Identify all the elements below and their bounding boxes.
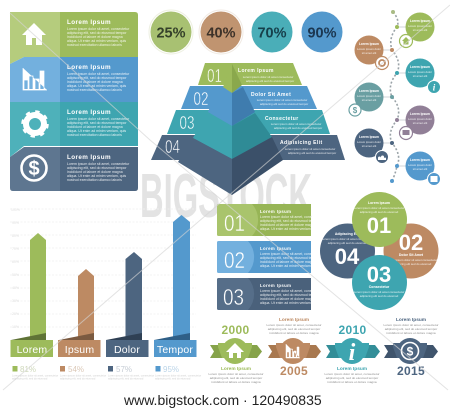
row: home: adipiscing elit, sed do eiusmod tempor (67, 31, 127, 35)
row: dollar: Lorem ipsum dolor sit amet, consectetur (67, 162, 130, 166)
level 3 strip (167, 110, 330, 134)
node: brown: Lorem ipsum dolor (357, 47, 381, 51)
wavy connector (390, 12, 399, 181)
row: home: nostrud exercitation ullamco laboris (67, 43, 122, 47)
row: dollar: adipiscing elit, sed do eiusmod tempor (67, 166, 127, 170)
connector stubs (383, 27, 406, 166)
node: green (400, 12, 434, 48)
footer url: www.bigstock.com · 120490835 (123, 392, 322, 408)
bar: Tempor: Tempor (157, 344, 193, 356)
row: gear: adipiscing elit, sed do eiusmod tempor (67, 121, 127, 125)
node: navy: Lorem Ipsum (359, 135, 379, 139)
node: purple (400, 106, 434, 140)
row: home: Lorem Ipsum (67, 19, 111, 26)
box 03 (217, 278, 323, 310)
box 02: incididunt ut labore et dolore magna (260, 260, 316, 264)
circle: 70%: 70% (257, 26, 287, 42)
petal diagram (320, 192, 438, 310)
milestone 2010: Lorem ipsum dolor sit amet, consectetur (324, 372, 380, 376)
milestone 2000: Lorem Ipsum (221, 366, 251, 372)
petal 01: 01 (367, 213, 391, 238)
node: teal: Lorem Ipsum (410, 65, 430, 69)
node: brown: sit amet elit (362, 51, 377, 55)
milestone 2000: incididunt ut labore et dolore magna (211, 380, 261, 384)
level 1 strip (198, 63, 302, 86)
level 1 strip: Lorem ipsum dolor sit amet consectetur (243, 75, 293, 79)
bar: Tempor (154, 215, 196, 357)
box 02 (217, 241, 323, 273)
bar: Lorem: Lorem (17, 344, 47, 356)
legend: 81% (20, 365, 36, 374)
level 3 strip: adipiscing elit sed do eiusmod tempor (274, 126, 322, 130)
legend: Lorem ipsum dolor sit amet, consectetur (155, 374, 201, 378)
row: gear: nostrud exercitation ullamco laboris (67, 133, 122, 137)
row: chart: nostrud exercitation ullamco laboris (67, 88, 122, 92)
petal 03: Lorem ipsum dolor sit amet consectetur (354, 290, 404, 294)
milestone 2005: Lorem Ipsum (279, 317, 309, 323)
milestone 2015: 2015 (397, 364, 425, 378)
petal 02 (384, 224, 438, 278)
circle: 70% (252, 12, 292, 52)
milestone 2015: incididunt ut labore et dolore magna (386, 331, 436, 335)
milestone 2000: 2000 (222, 323, 249, 337)
legend: 54% (68, 365, 84, 374)
node: teal: sit amet elit (413, 74, 428, 78)
petal 01: adipiscing elit sed do eiusmod (360, 210, 399, 214)
node: grey teal: Lorem Ipsum (359, 89, 379, 93)
box 02: 02 (224, 247, 245, 273)
petal 01 (352, 192, 407, 247)
node: navy: sit amet elit (362, 144, 377, 148)
legend: 57% (116, 365, 132, 374)
petal 02: 02 (399, 230, 423, 255)
circle: 40% (199, 10, 243, 54)
milestone 2010: i (349, 340, 356, 366)
legend: adipiscing elit, sed do eiusmod (155, 376, 191, 380)
level 3 strip: 03 (180, 113, 194, 133)
legend: adipiscing elit, sed do eiusmod (12, 376, 48, 380)
center square (375, 247, 383, 255)
axis labels: 20% (12, 312, 19, 316)
node: purple: sit amet elit (413, 121, 428, 125)
petal 04: 04 (335, 244, 360, 269)
axis labels: 30% (12, 299, 19, 303)
axis labels: 60% (12, 260, 19, 264)
node: grey teal (349, 82, 384, 116)
legend: Lorem ipsum dolor sit amet, consectetur (60, 374, 106, 378)
axis labels: 80% (12, 234, 19, 238)
petal 04 (320, 224, 375, 278)
box 01: 01 (224, 210, 245, 236)
circle: 40%: 40% (206, 26, 236, 42)
milestone 2010: Lorem Ipsum (337, 366, 367, 372)
petal 03: Consectetur (369, 285, 390, 289)
row: dollar: incididunt ut labore et dolore magna (67, 170, 123, 174)
node: green: Lorem Ipsum (410, 19, 430, 23)
level 3 strip: Consectetur (265, 116, 299, 122)
row: home: aliqua. Ut enim ad minim veniam, quis (67, 39, 126, 43)
bar: Dolor (106, 252, 148, 357)
node: blue: sit amet elit (413, 167, 428, 171)
row: gear: aliqua. Ut enim ad minim veniam, quis (67, 129, 126, 133)
level 1 strip: 01 (207, 66, 222, 86)
row: chart: incididunt ut labore et dolore magna (67, 80, 123, 84)
circle: 90% (302, 12, 342, 52)
milestone 2005: adipiscing elit, sed do eiusmod tempor (268, 327, 320, 331)
legend (12, 365, 201, 380)
axis labels: 70% (12, 247, 19, 251)
node: blue: Lorem ipsum dolor (408, 163, 432, 167)
circle: 25% (149, 10, 193, 54)
bar: Lorem (10, 233, 53, 357)
petal 03: adipiscing elit sed do eiusmod (360, 294, 399, 298)
row: home: incididunt ut labore et dolore magna (67, 35, 123, 39)
box 03: Lorem Ipsum (260, 283, 291, 288)
milestone 2015: $ (407, 344, 414, 358)
row: chart (10, 57, 138, 102)
axis labels (11, 208, 20, 329)
petal 04: Lorem ipsum dolor sit amet consectetur (322, 237, 372, 241)
axis labels: 10% (12, 325, 19, 329)
milestone 2015 (383, 317, 439, 378)
node: grey teal: $ (353, 106, 358, 115)
box 01: Lorem ipsum dolor sit amet, consectetur (260, 215, 323, 219)
axis labels: 50% (12, 273, 19, 277)
grid lines (10, 209, 196, 327)
node: blue (406, 152, 440, 186)
node: teal (406, 58, 440, 94)
row: dollar: $ (28, 158, 40, 180)
ribbon timeline (208, 317, 439, 384)
connector nodes (390, 10, 399, 183)
milestone 2005 (266, 317, 322, 378)
level 1 strip: Lorem Ipsum (238, 68, 274, 74)
box 03: Lorem ipsum dolor sit amet, consectetur (260, 289, 323, 293)
milestone 2005: Lorem ipsum dolor sit amet, consectetur (266, 323, 322, 327)
row: chart: Lorem Ipsum (67, 64, 111, 71)
bar: Dolor: Dolor (114, 344, 140, 356)
axis labels: 100% (11, 208, 20, 212)
milestone 2005: incididunt ut labore et dolore magna (269, 331, 319, 335)
box 03: incididunt ut labore et dolore magna (260, 297, 316, 301)
petal 02: Lorem ipsum dolor sit amet consectetur (387, 258, 437, 262)
petal 04: Adipiscing Elit (335, 232, 360, 236)
box 01: adipiscing elit, sed do eiusmod tempor (260, 219, 320, 223)
axis labels: 90% (12, 221, 19, 225)
row: gear: Lorem Ipsum (67, 109, 111, 116)
level 2 strip: 02 (194, 89, 208, 109)
node: navy: Lorem ipsum dolor (357, 140, 381, 144)
circle: 25%: 25% (156, 26, 186, 42)
panel: feature list (10, 12, 138, 191)
petal 03: 03 (367, 262, 391, 287)
box 02: Lorem Ipsum (260, 246, 291, 251)
row: gear (10, 102, 138, 157)
milestone 2015: Lorem ipsum dolor sit amet, consectetur (383, 323, 439, 327)
legend: 95% (163, 365, 179, 374)
legend: Lorem ipsum dolor sit amet, consectetur (12, 374, 58, 378)
row: dollar: nostrud exercitation ullamco laboris (67, 178, 122, 182)
row: dollar: aliqua. Ut enim ad minim veniam, quis (67, 174, 126, 178)
petal 04: adipiscing elit sed do eiusmod (328, 241, 367, 245)
box 02: Lorem ipsum dolor sit amet, consectetur (260, 252, 323, 256)
node: brown: Lorem Ipsum (359, 42, 379, 46)
row: home (10, 12, 138, 64)
node: purple: Lorem Ipsum (410, 112, 430, 116)
box 01: aliqua. Ut enim ad minim veniam (260, 227, 311, 231)
box 01: incididunt ut labore et dolore magna (260, 223, 316, 227)
petal 01: Lorem Ipsum (368, 201, 390, 205)
node: grey teal: Lorem ipsum dolor (357, 94, 381, 98)
level 4 strip: 04 (165, 137, 180, 157)
level 3 strip: Lorem ipsum dolor sit amet consectetur (271, 122, 321, 126)
node: grey teal: sit amet elit (362, 98, 377, 102)
milestone 2000: Lorem ipsum dolor sit amet, consectetur (208, 372, 264, 376)
node: teal: i (433, 82, 436, 92)
box 03: 03 (223, 284, 244, 310)
milestone 2010 (324, 323, 380, 384)
milestone 2010: 2010 (339, 323, 366, 337)
level 2 strip (181, 86, 317, 109)
box 01: Lorem Ipsum (260, 209, 291, 214)
percentage circles (149, 10, 342, 54)
level 2 strip: Lorem ipsum dolor sit amet consectetur (257, 98, 307, 102)
row: gear: incididunt ut labore et dolore magna (67, 125, 123, 129)
level 4 strip: Adipisicing Elit (280, 140, 323, 146)
node: brown (354, 36, 388, 70)
box 03: adipiscing elit, sed do eiusmod tempor (260, 293, 320, 297)
box 03: aliqua. Ut enim ad minim veniam (260, 301, 311, 305)
center pyramid (178, 64, 283, 195)
bar: Ipsum (58, 269, 100, 357)
petal 01: Lorem ipsum dolor sit amet consectetur (354, 206, 404, 210)
row: chart: aliqua. Ut enim ad minim veniam, quis (67, 84, 126, 88)
node: navy (354, 128, 388, 164)
node: green: Lorem ipsum dolor (408, 24, 432, 28)
level 4 strip (151, 135, 345, 160)
box 01 (217, 204, 323, 236)
timeline (349, 10, 440, 186)
row: dollar: Lorem Ipsum (67, 154, 111, 161)
bar chart (10, 208, 201, 380)
node: purple: Lorem ipsum dolor (408, 117, 432, 121)
bar: Ipsum: Ipsum (65, 344, 94, 356)
box 02: adipiscing elit, sed do eiusmod tempor (260, 256, 320, 260)
milestone 2015: Lorem Ipsum (396, 317, 426, 323)
level 2 strip: Dolor Sit Amet (251, 92, 291, 98)
axis labels: 40% (12, 286, 19, 290)
petal 02: Dolor Sit Amet (399, 253, 424, 257)
row: gear: Lorem ipsum dolor sit amet, consectetur (67, 117, 130, 121)
level 1 strip: adipiscing elit sed do eiusmod tempor (246, 79, 294, 83)
row: chart: Lorem ipsum dolor sit amet, consectetur (67, 72, 130, 76)
legend: Lorem ipsum dolor sit amet, consectetur (108, 374, 154, 378)
petal 02: adipiscing elit sed do eiusmod (393, 262, 432, 266)
level 4 strip: Lorem ipsum dolor sit amet consectetur (285, 147, 335, 151)
row: chart: adipiscing elit, sed do eiusmod tempor (67, 76, 127, 80)
milestone 2010: incididunt ut labore et dolore magna (327, 380, 377, 384)
row: dollar (10, 147, 138, 191)
petal 03 (352, 255, 407, 310)
milestone 2000 (208, 323, 264, 384)
box 02: aliqua. Ut enim ad minim veniam (260, 264, 311, 268)
milestone 2015: adipiscing elit, sed do eiusmod tempor (385, 327, 437, 331)
circle: 90%: 90% (307, 26, 337, 42)
level 4 strip: adipiscing elit sed do eiusmod tempor (288, 151, 336, 155)
level 2 strip: adipiscing elit sed do eiusmod tempor (260, 102, 308, 106)
pyramid (151, 63, 345, 195)
milestone 2000: adipiscing elit, sed do eiusmod tempor (210, 376, 262, 380)
node: green: sit amet elit (413, 28, 428, 32)
legend: adipiscing elit, sed do eiusmod (60, 376, 96, 380)
milestone 2010: adipiscing elit, sed do eiusmod tempor (326, 376, 378, 380)
row: home: Lorem ipsum dolor sit amet, consectetur (67, 27, 130, 31)
node: teal: Lorem ipsum dolor (408, 70, 432, 74)
numbered boxes (217, 204, 323, 310)
milestone 2005: 2005 (280, 364, 308, 378)
legend: adipiscing elit, sed do eiusmod (108, 376, 144, 380)
node: blue: Lorem Ipsum (410, 158, 430, 162)
